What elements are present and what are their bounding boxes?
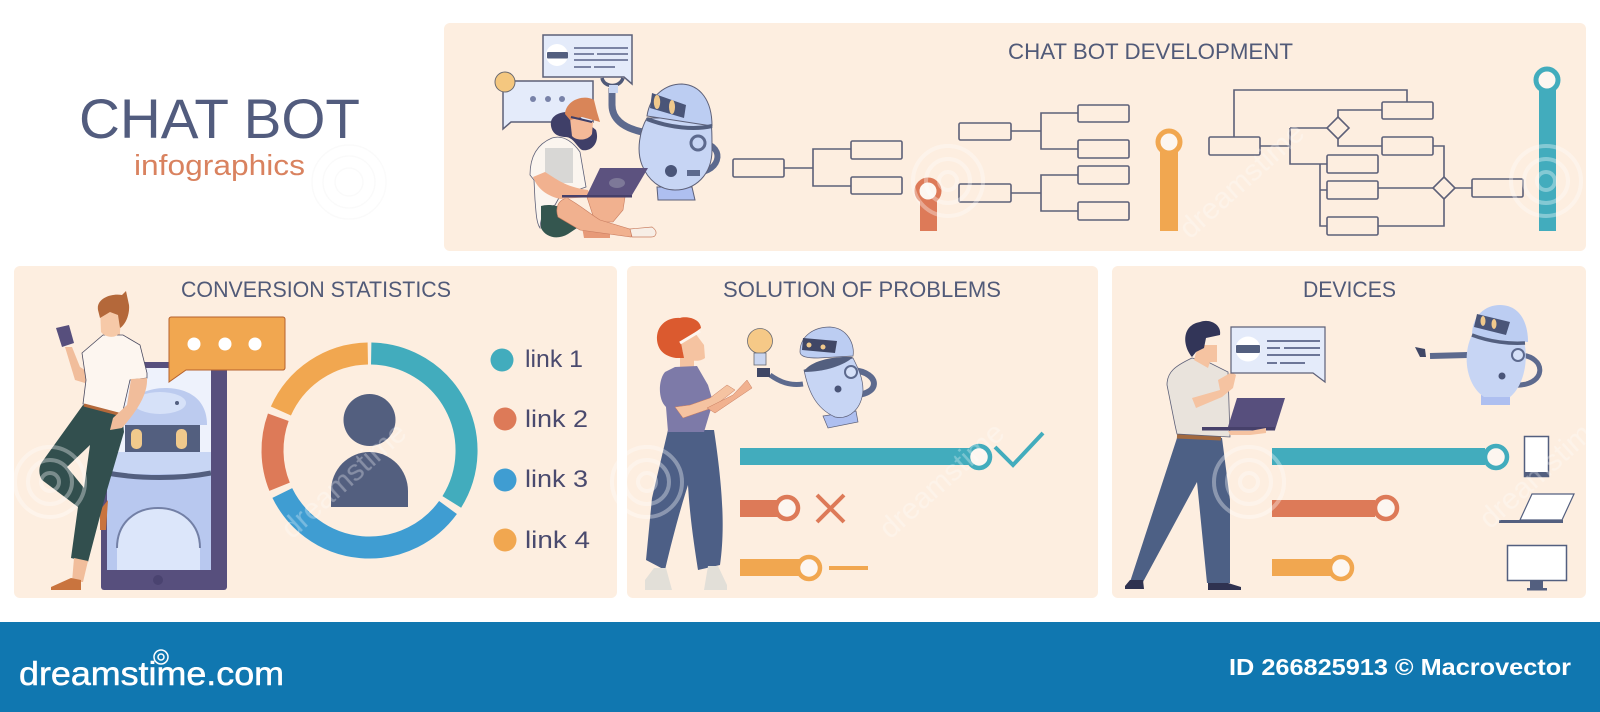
progress bar: orange <box>740 557 820 579</box>
donut chart <box>272 354 467 548</box>
footer logo text: dreamstime.com <box>19 655 284 692</box>
watermark text: dreamstime <box>873 416 1011 545</box>
marker: short red column <box>917 180 939 231</box>
icon: cross <box>817 495 844 522</box>
heading: chat bot development: CHAT BOT DEVELOPMENT <box>1008 39 1293 64</box>
title: CHAT BOT <box>79 87 360 150</box>
phone with robot on screen <box>101 362 227 590</box>
marker: medium orange column <box>1158 131 1180 231</box>
icon: tablet <box>1524 436 1549 477</box>
person: man with laptop <box>1125 321 1285 590</box>
watermark spirals <box>15 145 1581 517</box>
robot: pointing <box>1415 305 1540 405</box>
watermark text: dreamstime <box>1173 116 1311 245</box>
person: woman with laptop <box>530 98 656 238</box>
icon: monitor <box>1508 546 1566 590</box>
icon: laptop <box>1499 494 1574 523</box>
speech bubble with bot message <box>543 35 632 84</box>
legend: link 3 <box>525 466 588 493</box>
robot: holding bulb <box>757 327 874 428</box>
panel: devices <box>1112 266 1586 598</box>
legend: link 4 <box>525 527 590 554</box>
progress bar: teal <box>740 446 990 468</box>
title <box>79 87 360 182</box>
speech bubble: orange with dots <box>169 317 285 382</box>
icon: light bulb <box>748 328 772 365</box>
progress bar: red <box>1272 497 1397 519</box>
footer credit: ID 266825913 © Macrovector <box>1229 654 1571 680</box>
watermark text: dreamstime <box>275 416 413 545</box>
legend: link 1 <box>525 346 583 373</box>
heading: conversion statistics: CONVERSION STATISTICS <box>181 277 451 302</box>
progress bar: teal <box>1272 446 1507 468</box>
footer banner <box>0 622 1600 712</box>
panel: conversion statistics <box>14 266 617 598</box>
flowchart: complex <box>1209 90 1523 235</box>
icon: user <box>331 394 408 507</box>
legend <box>490 346 590 554</box>
panel: solution of problems <box>627 266 1098 598</box>
panel: chat bot development <box>444 23 1586 251</box>
subtitle: infographics <box>134 150 305 182</box>
icon: check mark <box>995 433 1043 465</box>
marker: tall teal column <box>1536 69 1558 231</box>
flowchart: small <box>733 141 902 194</box>
progress bar: red <box>740 497 798 519</box>
icon: dash <box>829 566 868 570</box>
watermark text <box>275 116 1600 545</box>
robot: waving <box>602 78 717 200</box>
heading: devices: DEVICES <box>1303 277 1396 302</box>
person: woman with red hair <box>645 317 752 590</box>
speech bubble <box>1231 327 1325 382</box>
flowchart: medium <box>959 105 1129 220</box>
progress bar: orange <box>1272 557 1352 579</box>
footer logo spiral <box>154 650 168 664</box>
person: man with phone <box>39 291 147 590</box>
speech bubble with dots <box>495 72 593 129</box>
heading: solution of problems: SOLUTION OF PROBLEMS <box>723 277 1001 302</box>
legend: link 2 <box>525 406 588 433</box>
